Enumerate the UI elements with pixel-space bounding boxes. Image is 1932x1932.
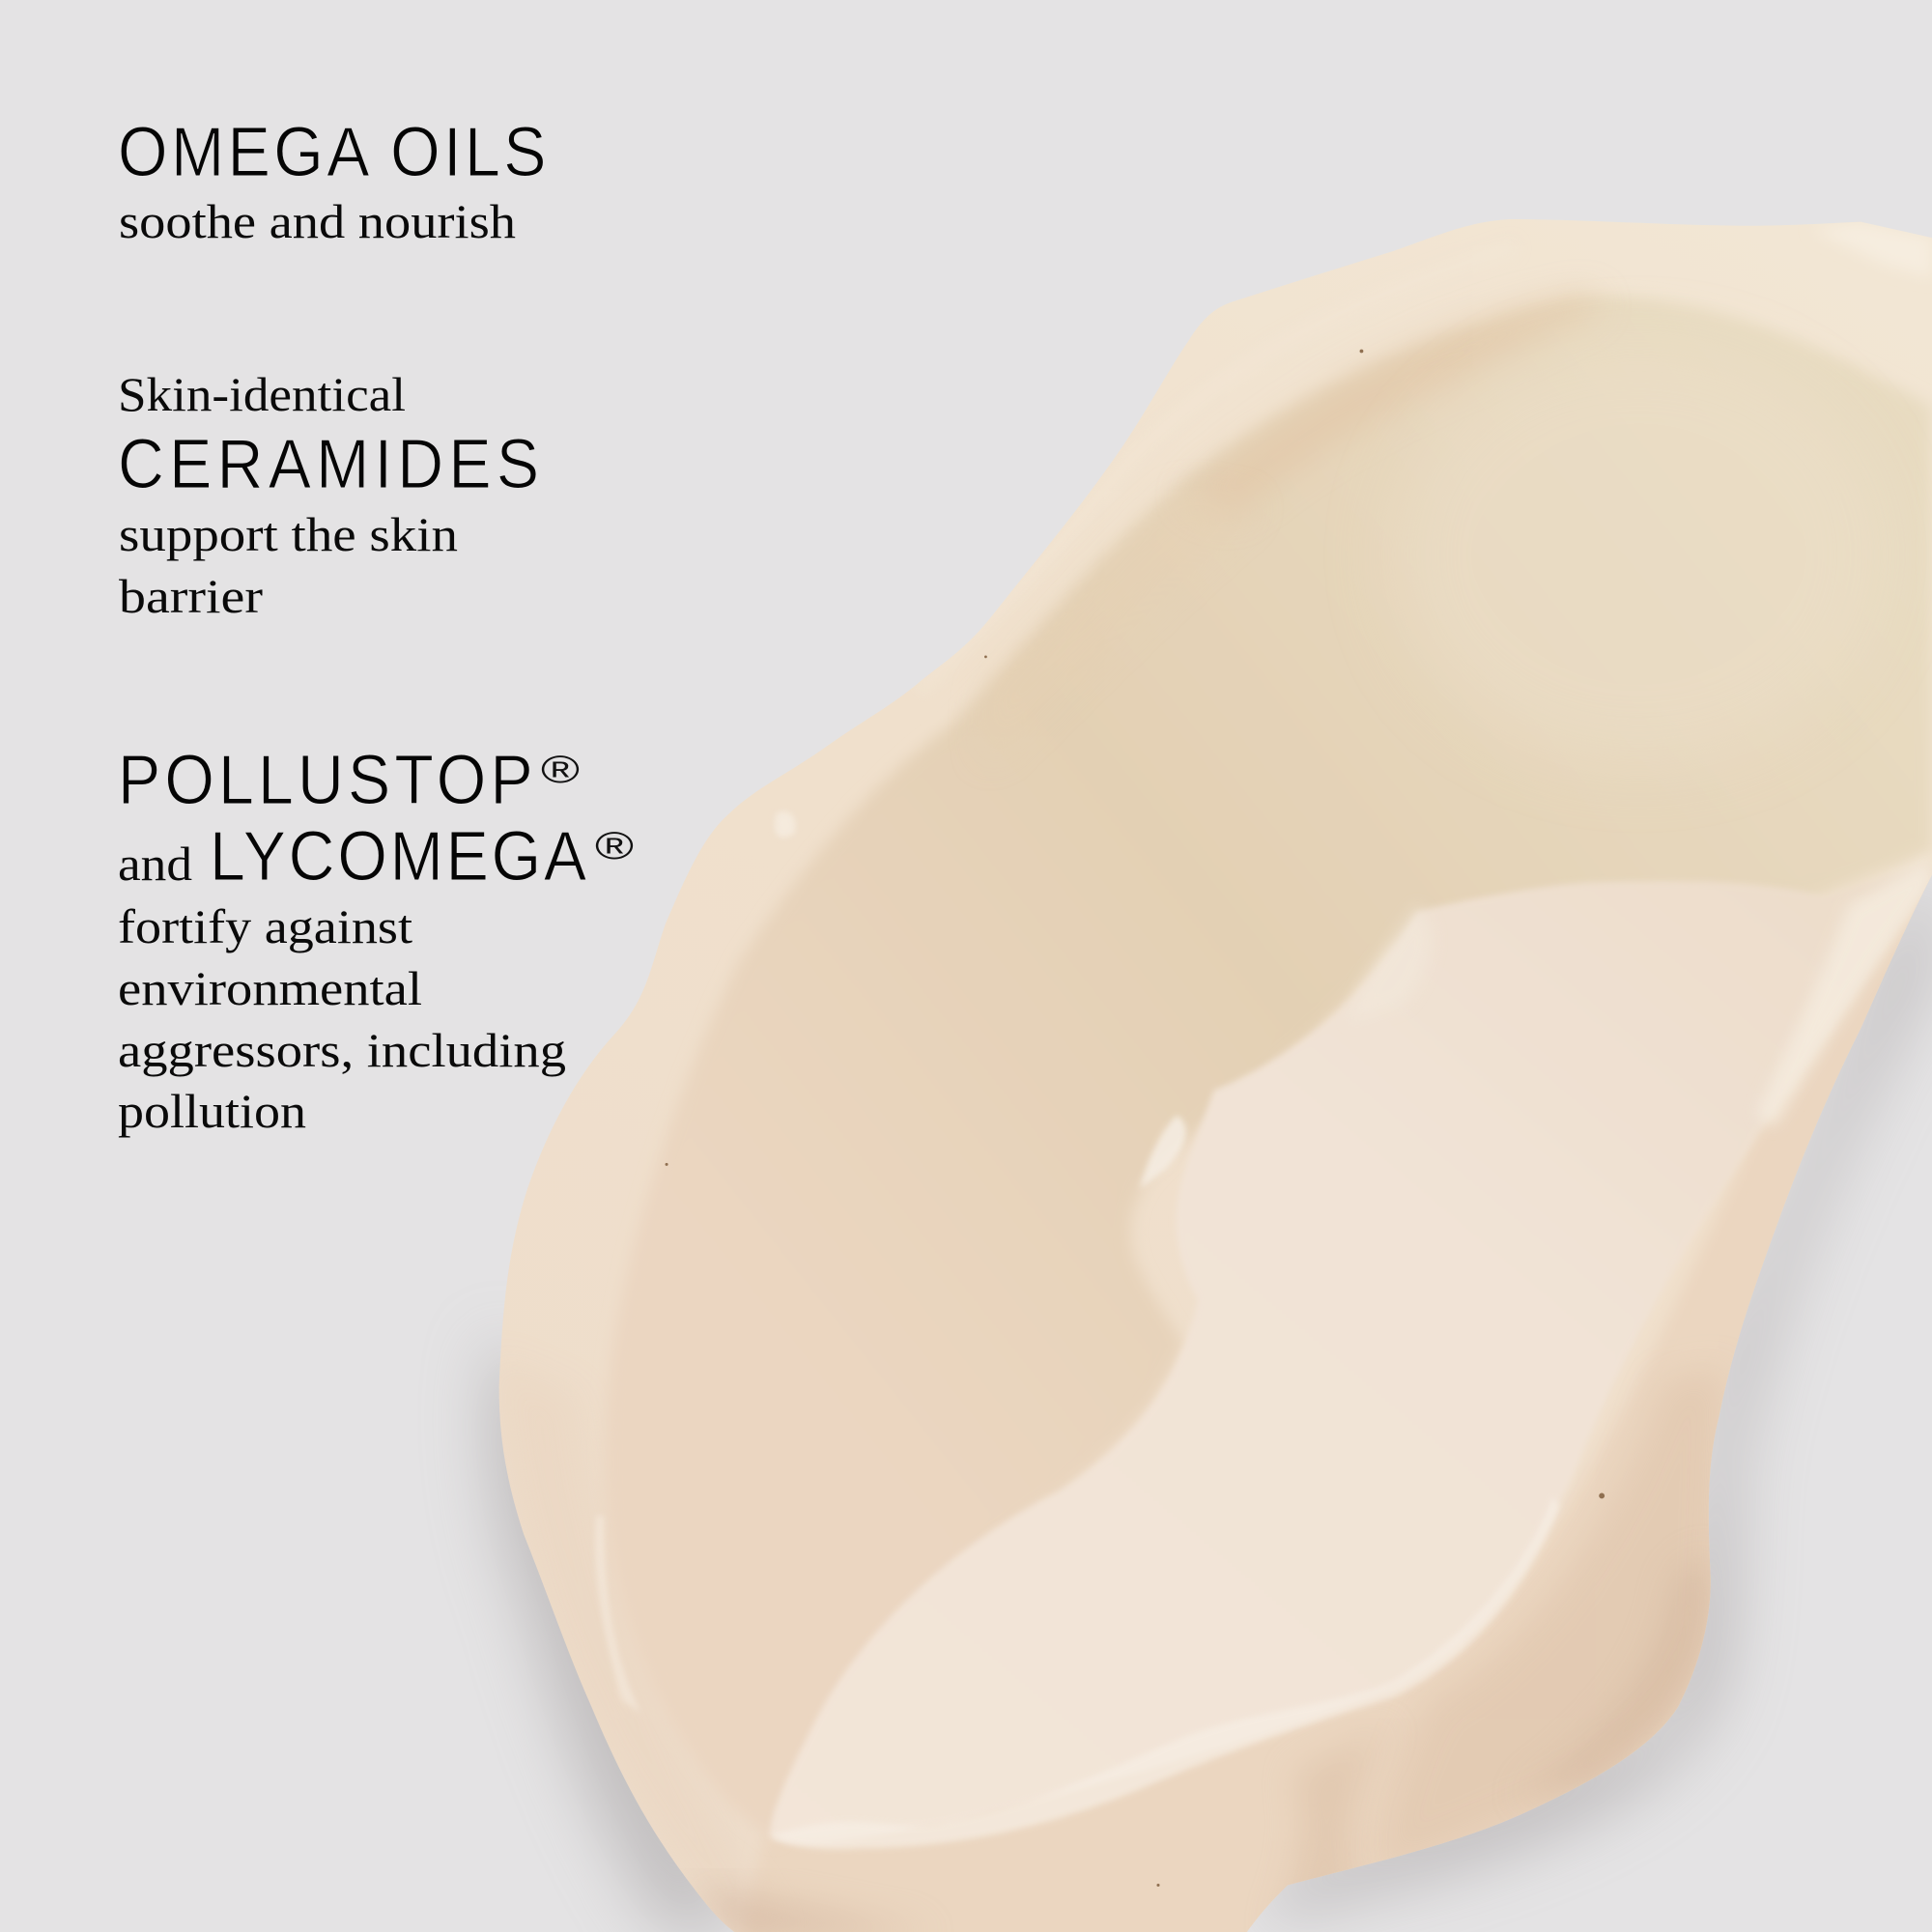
text: barrier: barrier (119, 569, 263, 623)
speckles (666, 350, 1605, 1887)
heading: CERAMIDES: CERAMIDES (118, 424, 539, 503)
gloss highlights (595, 222, 1932, 1849)
text: soothe and nourish: soothe and nourish (119, 194, 516, 248)
cream rim (469, 197, 1932, 1932)
heading: POLLUSTOP: POLLUSTOP (118, 740, 533, 819)
text: support the skin: support the skin (119, 507, 458, 561)
bowl upper yellow area (605, 296, 1932, 1842)
lower smooth light area (769, 881, 1800, 1837)
heading: LYCOMEGA: LYCOMEGA (210, 816, 586, 895)
warm inner edge shading (1215, 291, 1579, 498)
text: pollution: pollution (118, 1084, 306, 1138)
text block: ceramides (118, 367, 539, 623)
cast shadow (488, 850, 1932, 1932)
registered mark: ® (541, 749, 580, 791)
text block: omega oils (118, 112, 546, 248)
text: and: and (118, 837, 192, 891)
text: aggressors, including: aggressors, including (118, 1023, 566, 1077)
registered mark: ® (595, 825, 634, 867)
lower rim shading (739, 863, 1932, 1932)
heading: OMEGA OILS: OMEGA OILS (118, 112, 546, 191)
text: environmental: environmental (118, 961, 422, 1015)
text: fortify against: fortify against (118, 899, 412, 953)
text block: pollustop and lycomega (118, 740, 634, 1138)
product smear: cream swatch (469, 197, 1932, 1932)
upper-right glow (1392, 345, 1886, 764)
text: skin-identical: Skin-identical (118, 367, 406, 421)
